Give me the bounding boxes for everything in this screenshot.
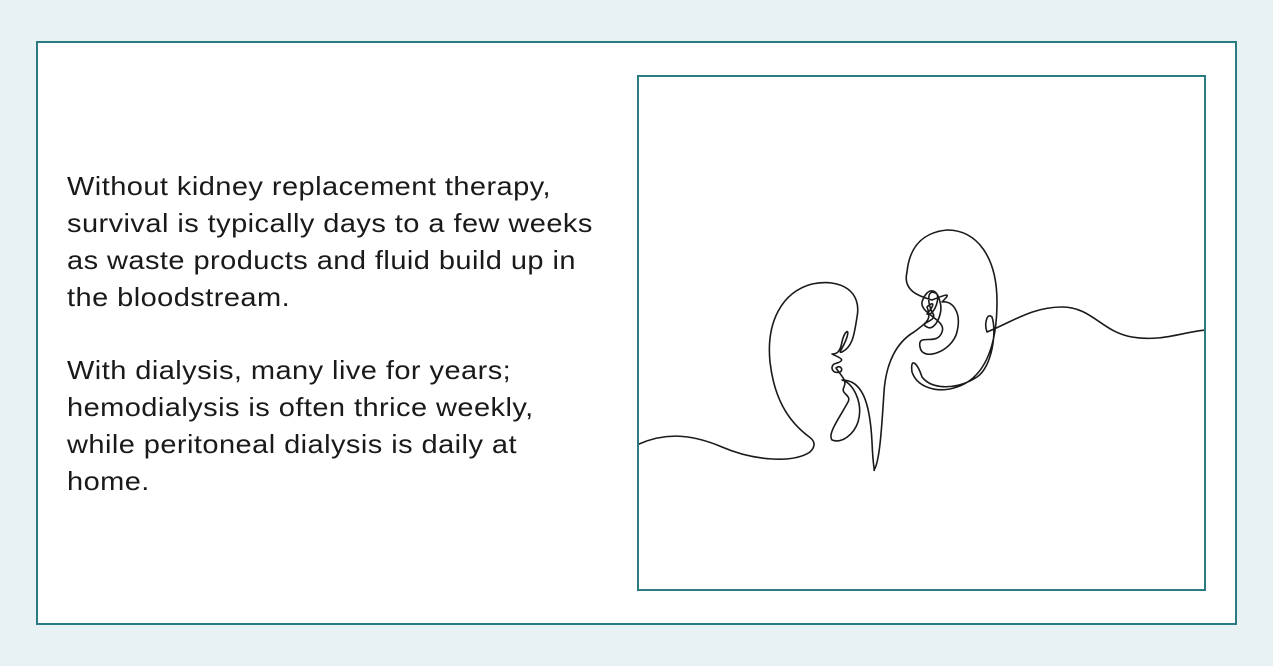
text block: without therapy	[67, 171, 593, 312]
text block: with dialysis: With dialysis, many live for years;	[67, 355, 511, 385]
text block: with dialysis	[67, 355, 534, 496]
text block: without therapy: as waste products and fluid build up in	[67, 245, 576, 275]
text block: without therapy: survival is typically days to a few weeks	[67, 208, 593, 238]
text block: with dialysis: while peritoneal dialysis is daily at	[67, 429, 517, 459]
text block: without therapy: the bloodstream.	[67, 282, 290, 312]
illustration: line-art kidneys	[637, 75, 1206, 591]
text block: with dialysis: home.	[67, 466, 150, 496]
text block: with dialysis: hemodialysis is often thrice weekly,	[67, 392, 534, 422]
text block: without therapy: Without kidney replacement therapy,	[67, 171, 551, 201]
